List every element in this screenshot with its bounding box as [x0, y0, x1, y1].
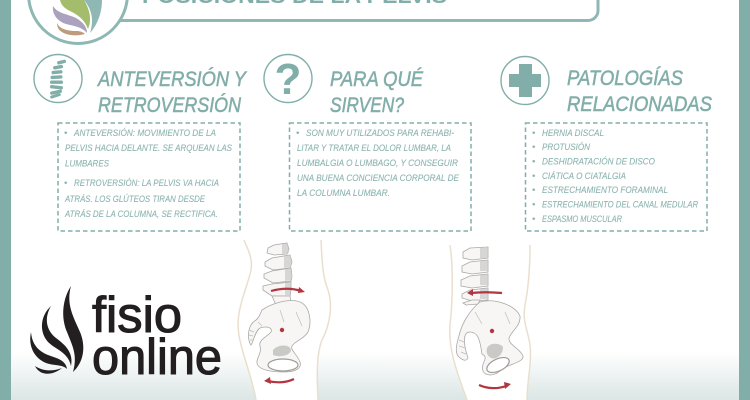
- rotation centre dot: [280, 328, 284, 332]
- wordmark: [92, 287, 222, 385]
- red arrow bottom: [479, 382, 511, 389]
- pelvis: [248, 301, 310, 372]
- logo badge: [28, 0, 128, 44]
- text box: •: [532, 200, 536, 210]
- icon: coloured flame leaves: [53, 0, 102, 35]
- text box: SON MUY UTILIZADOS PARA REHABI-: [306, 128, 454, 139]
- text box: LUMBARES: [65, 158, 110, 170]
- icon: medical cross: [501, 56, 549, 104]
- rotation centre dot: [490, 329, 494, 333]
- text box: LITAR Y TRATAR EL DOLOR LUMBAR, LA: [297, 143, 451, 154]
- column: anteversión y retroversión: [34, 54, 248, 231]
- body silhouette: [238, 240, 330, 400]
- text box: RETROVERSIÓN: LA PELVIS VA HACIA: [74, 178, 219, 189]
- text box: DESHIDRATACIÓN DE DISCO: [542, 156, 656, 168]
- red arrow top: [271, 287, 305, 293]
- text box: •: [532, 142, 536, 153]
- text box: •: [64, 178, 68, 189]
- text box: ESTRECHAMIENTO DEL CANAL MEDULAR: [542, 200, 698, 210]
- red arrow top: [467, 289, 502, 296]
- text box: ANTEVERSIÓN: MOVIMIENTO DE LA: [73, 128, 216, 139]
- text box: CIÁTICA O CIATALGIA: [542, 171, 626, 182]
- text box: •: [64, 128, 68, 139]
- text box: ATRÁS. LOS GLÚTEOS TIRAN DESDE: [64, 194, 206, 205]
- text box: •: [532, 214, 536, 225]
- column: para qué sirven: [264, 54, 471, 231]
- text box: HERNIA DISCAL: [542, 128, 604, 139]
- heading: PARA QUÉ: [330, 68, 424, 91]
- heading: ANTEVERSIÓN Y: [96, 68, 248, 91]
- heading: SIRVEN?: [330, 94, 404, 117]
- text box: •: [296, 128, 300, 139]
- body silhouette: [450, 245, 530, 400]
- text box: •: [532, 128, 536, 139]
- text box: [290, 123, 471, 231]
- wordmark: online: [92, 329, 222, 385]
- text box: •: [532, 185, 536, 196]
- heading: RETROVERSIÓN: [98, 94, 242, 117]
- red arrow bottom: [264, 377, 294, 384]
- text box: ESPASMO MUSCULAR: [542, 214, 622, 225]
- text box: UNA BUENA CONCIENCIA CORPORAL DE: [297, 173, 460, 184]
- text box: [526, 123, 707, 231]
- wordmark: fisio: [92, 287, 182, 343]
- text box: LUMBALGIA O LUMBAGO, Y CONSEGUIR: [297, 158, 458, 169]
- icon: black flame: [30, 286, 83, 374]
- fisio online logo: [30, 286, 222, 385]
- icon: question mark: ?: [275, 55, 301, 104]
- spine: [461, 247, 488, 305]
- column: patologías relacionadas: [501, 56, 712, 231]
- illustration: pelvis anteversion: [238, 240, 330, 400]
- heading: [330, 68, 424, 117]
- heading: [567, 67, 712, 116]
- heading: RELACIONADAS: [567, 93, 712, 116]
- text box: [58, 123, 240, 231]
- icon: question mark: [264, 54, 312, 104]
- text box: PELVIS HACIA DELANTE. SE ARQUEAN LAS: [65, 143, 233, 154]
- heading: PATOLOGÍAS: [567, 67, 683, 90]
- text box: ESTRECHAMIENTO FORAMINAL: [542, 185, 668, 196]
- title panel: [120, 0, 598, 20]
- left side bar: [0, 0, 11, 400]
- text box: ATRÁS DE LA COLUMNA, SE RECTIFICA.: [64, 209, 218, 220]
- pelvis: [456, 301, 523, 376]
- text box: •: [532, 156, 536, 168]
- text box: •: [532, 171, 536, 182]
- icon: spine: [34, 54, 82, 102]
- right side bar: [739, 0, 750, 400]
- spine: [263, 243, 292, 305]
- heading: [96, 68, 248, 117]
- illustration: pelvis retroversion: [450, 245, 530, 400]
- text box: LA COLUMNA LUMBAR.: [297, 188, 390, 199]
- text box: PROTUSIÓN: [542, 142, 590, 153]
